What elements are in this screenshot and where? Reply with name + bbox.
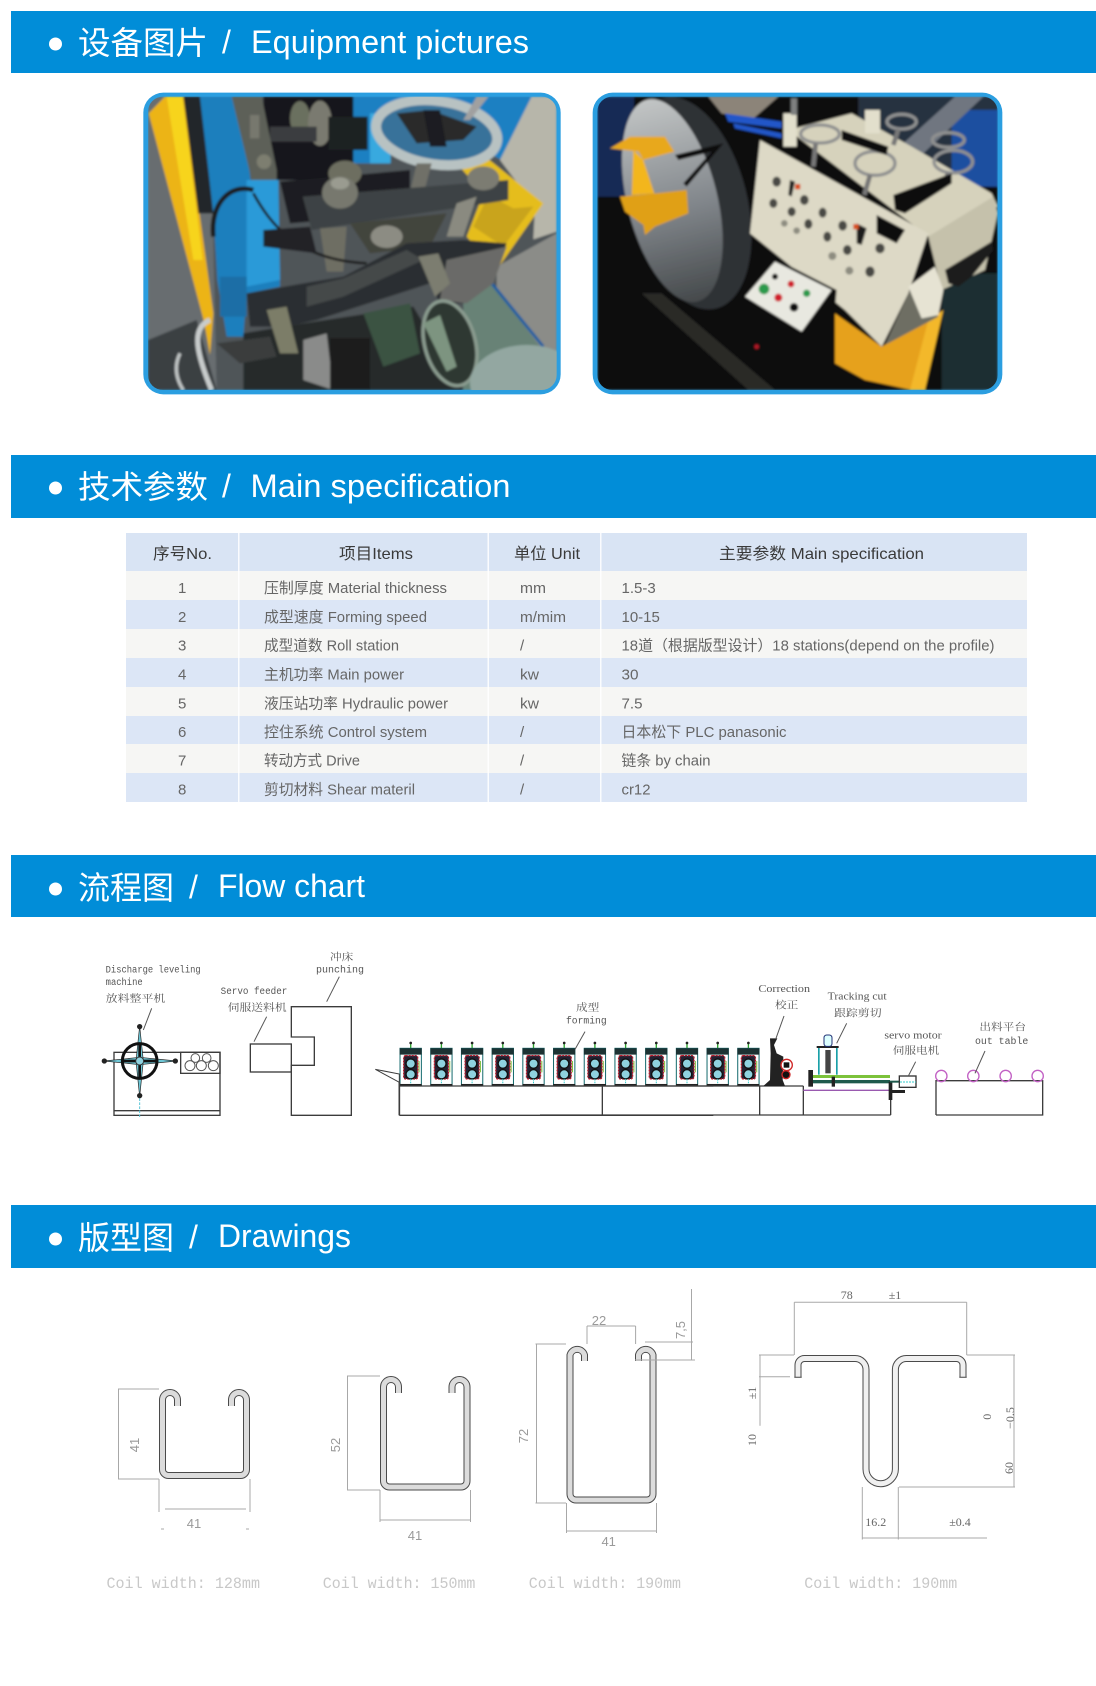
specification table: 链条 by chain	[622, 752, 710, 770]
punching press: 冲床	[330, 951, 353, 964]
specification table: 18道（根据版型设计）18 stations(depend on the profile)	[622, 638, 995, 654]
servo motor: 伺服电机	[893, 1044, 939, 1057]
drawing: T profile 78 x 60: ±1	[745, 1387, 759, 1399]
caption: Coil width: 190mm	[529, 1575, 681, 1593]
section banner: flow chart: /	[189, 869, 198, 905]
specification table: /	[520, 782, 525, 798]
flow chart: decoiler, servo feeder and punching	[102, 951, 364, 1117]
specification table: m/mim	[520, 609, 566, 626]
section banner: equipment pictures: 设备图片	[78, 25, 208, 61]
flow chart: machine frame base	[375, 1069, 713, 1115]
drawing: C channel 41 x 72: 7,5	[673, 1321, 688, 1339]
decoiler leveling machine: 放料整平机	[106, 992, 165, 1005]
specification table: kw	[520, 666, 539, 684]
specification table: 1.5-3	[622, 580, 656, 597]
servo motor	[884, 1030, 942, 1100]
servo feeder	[221, 986, 291, 1072]
drawing: C channel 41 x 41	[106, 1389, 260, 1593]
flow chart: forming stations row	[400, 1042, 759, 1086]
specification table: /	[520, 638, 525, 654]
out table: out table	[975, 1036, 1028, 1047]
out table: 出料平台	[979, 1020, 1026, 1033]
specification table: 主要参数 Main specification	[719, 545, 924, 563]
section banner: drawings: Drawings	[218, 1218, 351, 1254]
servo feeder: Servo feeder	[221, 986, 287, 997]
drawing: C channel 41 x 72: 72	[516, 1429, 531, 1443]
specification table: 7.5	[622, 696, 642, 712]
specification table: 剪切材料 Shear materil	[264, 782, 415, 798]
drawing: C channel 41 x 52	[323, 1376, 475, 1593]
drawing: C channel 41 x 72	[516, 1289, 695, 1593]
specification table: 序号No.	[153, 545, 212, 563]
drawing: C channel 41 x 72: 22	[592, 1313, 606, 1328]
punching press: punching	[316, 965, 364, 976]
section banner: main specification: Main specification	[250, 468, 510, 504]
section banner: main specification	[11, 455, 1096, 518]
forming label: forming	[566, 1016, 607, 1027]
section banner: drawings: /	[189, 1219, 198, 1255]
decoiler leveling machine: Discharge leveling	[106, 965, 201, 976]
drawing: T profile 78 x 60: ±0.4	[949, 1515, 971, 1529]
decoiler leveling machine: machine	[106, 977, 143, 988]
specification table: 1	[178, 580, 186, 597]
specification table: 4	[178, 666, 186, 684]
drawing: C channel 41 x 52: 41	[408, 1528, 422, 1543]
specification table: 2	[178, 609, 186, 626]
specification table: mm	[520, 580, 546, 597]
drawing: C channel 41 x 52: 52	[328, 1438, 343, 1452]
caption: Coil width: 150mm	[323, 1575, 475, 1593]
section banner: flow chart	[11, 855, 1096, 917]
drawing: T profile 78 x 60	[745, 1288, 1017, 1593]
section banner: main specification: 技术参数	[78, 469, 208, 505]
drawing: T profile 78 x 60: 78	[841, 1288, 853, 1302]
drawing: T profile 78 x 60: −0.5	[1003, 1407, 1017, 1429]
drawing: T profile 78 x 60: 16.2	[865, 1515, 886, 1529]
specification table: 单位 Unit	[514, 545, 581, 563]
caption: Coil width: 128mm	[106, 1575, 260, 1593]
specification table: 主机功率 Main power	[264, 666, 404, 684]
photo: servo feeder and coil decoiler	[593, 84, 1002, 394]
correction unit: 校正	[775, 998, 798, 1011]
frame sections	[540, 1086, 891, 1115]
section banner: equipment pictures: Equipment pictures	[251, 24, 529, 60]
photo: roll forming machine with hand wheel	[143, 92, 561, 394]
punching press	[291, 951, 364, 1115]
specification table: 10-15	[622, 609, 660, 626]
tracking cut	[808, 991, 890, 1087]
specification table: 压制厚度 Material thickness	[264, 580, 447, 597]
specification table: 转动方式 Drive	[264, 752, 360, 770]
drawing: C channel 41 x 41: 41	[127, 1438, 142, 1452]
tracking cut: 跟踪剪切	[834, 1007, 882, 1020]
correction unit	[758, 984, 810, 1086]
forming label: 成型	[576, 1001, 599, 1014]
drawing: C channel 41 x 41: 41	[187, 1516, 201, 1531]
specification table: cr12	[622, 782, 650, 798]
correction unit: Correction	[758, 984, 810, 995]
specification table: 30	[622, 666, 638, 684]
decoiler leveling machine	[102, 965, 220, 1117]
specification table: 7	[178, 752, 186, 770]
specification table: 液压站功率 Hydraulic power	[264, 696, 448, 712]
section banner: equipment pictures: /	[222, 24, 231, 60]
section banner: main specification: /	[222, 468, 231, 504]
flow chart: forming, correction, tracking cut, servo motor, out table	[540, 984, 1043, 1115]
section banner: flow chart: Flow chart	[218, 868, 365, 904]
specification table: 日本松下 PLC panasonic	[622, 724, 787, 741]
drawing: T profile 78 x 60: 60	[1002, 1462, 1016, 1474]
specification table: 成型速度 Forming speed	[264, 609, 427, 626]
servo motor: servo motor	[884, 1030, 942, 1041]
specification table: 项目Items	[339, 546, 413, 563]
specification table: 6	[178, 724, 186, 741]
drawing: C channel 41 x 72: 41	[601, 1534, 616, 1549]
specification table: 控住系统 Control system	[264, 724, 427, 741]
drawing: T profile 78 x 60: ±1	[889, 1288, 901, 1302]
specification table: /	[520, 752, 525, 770]
specification table: 8	[178, 782, 186, 798]
specification table: 5	[178, 696, 186, 712]
specification table	[126, 533, 1027, 802]
drawing: T profile 78 x 60: 10	[745, 1434, 759, 1446]
caption: Coil width: 190mm	[804, 1575, 957, 1593]
servo feeder: 伺服送料机	[228, 1001, 287, 1014]
forming label	[566, 1001, 607, 1049]
section banner: drawings	[11, 1205, 1096, 1268]
specification table: /	[520, 724, 525, 741]
specification table: 成型道数 Roll station	[264, 638, 399, 654]
section banner: flow chart: 流程图	[78, 870, 174, 906]
tracking cut: Tracking cut	[828, 991, 887, 1002]
specification table: kw	[520, 696, 539, 712]
section banner: drawings: 版型图	[78, 1220, 174, 1256]
out table	[936, 1020, 1043, 1115]
drawing: T profile 78 x 60: 0	[980, 1414, 994, 1420]
section banner: equipment pictures	[11, 11, 1096, 73]
specification table: 3	[178, 638, 186, 654]
